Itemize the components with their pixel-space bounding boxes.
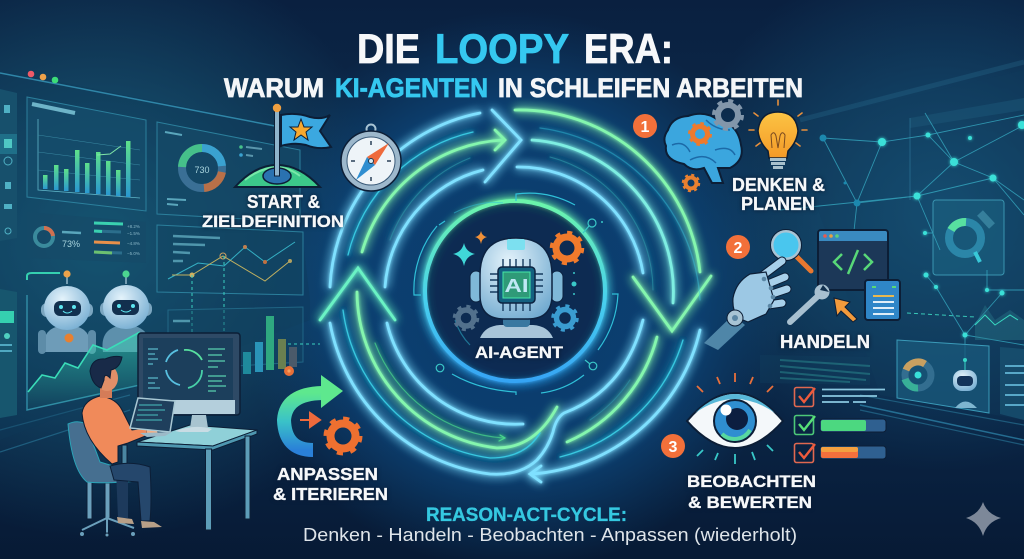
title: WARUM xyxy=(224,73,324,103)
lower left panel xyxy=(0,273,140,418)
step 1: think and plan xyxy=(633,100,825,214)
icon: robot hand xyxy=(704,261,787,350)
trousers and shoes xyxy=(110,463,162,528)
thin arcs xyxy=(343,128,700,458)
badge 1 xyxy=(633,114,657,138)
title: LOOPY xyxy=(435,25,569,72)
badge 3: 3 xyxy=(669,439,678,456)
label xyxy=(273,464,388,504)
bar chart panel xyxy=(27,97,146,211)
icon: small arrow xyxy=(300,413,320,427)
head xyxy=(90,356,122,398)
title: ERA: xyxy=(584,25,673,72)
far right panel xyxy=(1000,347,1024,420)
gear orange xyxy=(552,233,582,263)
gear blue xyxy=(553,306,577,330)
monitor xyxy=(138,333,240,432)
icon: curved arrow xyxy=(284,375,343,450)
person at desk xyxy=(68,333,257,537)
gear small xyxy=(683,175,699,191)
label: BEOBACHTEN xyxy=(687,472,816,491)
sparkles xyxy=(453,231,487,266)
label: Start & Zieldefinition: ZIELDEFINITION xyxy=(202,212,344,231)
progress panel 73%: +8.2% xyxy=(127,224,140,229)
icon: magnifier xyxy=(770,230,811,271)
label: AI-Agent: AI-AGENT xyxy=(475,343,564,362)
dim list panel xyxy=(760,355,870,385)
checklist xyxy=(794,388,886,462)
desk xyxy=(122,425,257,530)
reason-act-cycle caption: Denken - Handeln - Beobachten - Anpassen (wiederholt) xyxy=(303,525,797,545)
green arcs xyxy=(320,110,711,448)
icon: card xyxy=(865,280,900,320)
left dashboard wall xyxy=(0,70,320,440)
donut panel 730: 730 xyxy=(194,165,210,175)
icon: flag on hill xyxy=(235,104,331,187)
badge 2 xyxy=(726,235,750,259)
gear on brain xyxy=(690,124,710,144)
label: ANPASSEN xyxy=(277,464,378,484)
icon: gear xyxy=(326,419,360,453)
gear grey xyxy=(454,306,478,330)
window dots xyxy=(28,71,58,83)
progress panel 73%: −4.8% xyxy=(127,241,140,246)
lower bar panel xyxy=(168,307,320,376)
title xyxy=(224,25,803,103)
progress panel 73%: −1.5% xyxy=(127,231,140,236)
step 2: act xyxy=(704,230,900,352)
inner agent ring xyxy=(414,193,618,395)
neon loop arrows xyxy=(320,110,711,482)
progress panel 73%: −5.0% xyxy=(127,251,140,256)
title: DIE xyxy=(357,25,420,72)
chair xyxy=(68,422,139,537)
reason-act-cycle caption: REASON-ACT-CYCLE: xyxy=(426,505,627,526)
robot right xyxy=(100,270,152,352)
title: IN SCHLEIFEN ARBEITEN xyxy=(498,73,803,103)
gear grey xyxy=(714,101,742,129)
icon: code window xyxy=(818,230,888,290)
badge 2: 2 xyxy=(734,240,743,257)
label: & BEWERTEN xyxy=(688,493,812,512)
sidebar xyxy=(0,89,17,241)
mini dashboard with robot xyxy=(897,340,989,413)
icon: light bulb xyxy=(749,100,807,169)
step 3: observe xyxy=(661,373,886,512)
adapt and iterate xyxy=(273,375,388,504)
progress panel 73%: 73% xyxy=(62,239,80,249)
label: DENKEN & xyxy=(732,175,825,195)
chart panel xyxy=(933,200,1004,275)
icon: compass xyxy=(341,124,401,191)
title: KI-AGENTEN xyxy=(335,73,488,103)
center AI robot icon: AI xyxy=(504,276,528,296)
label xyxy=(687,472,816,512)
robot left xyxy=(38,270,96,354)
blue arcs xyxy=(330,110,700,482)
label xyxy=(732,175,825,214)
laptop xyxy=(130,398,175,437)
reason-act-cycle caption xyxy=(303,505,797,545)
badge 3 xyxy=(661,434,685,458)
back window xyxy=(910,98,1024,200)
icon: wrench xyxy=(790,284,830,322)
right dashboard wall with network xyxy=(760,62,1024,440)
label: & ITERIEREN xyxy=(273,484,388,504)
icon: brain xyxy=(664,114,742,183)
center AI robot icon xyxy=(453,231,582,338)
icon: eye xyxy=(687,373,783,464)
progress panel 73% xyxy=(27,212,146,263)
dashed connector and mini chart xyxy=(907,305,1024,340)
network graph xyxy=(780,113,1024,360)
donut panel 730 xyxy=(157,122,300,222)
growth chart xyxy=(28,332,140,410)
sparkle watermark xyxy=(966,502,1001,536)
robots with growth chart xyxy=(28,270,152,410)
line chart panel xyxy=(157,225,303,345)
badge 1: 1 xyxy=(641,119,650,136)
icon: cursor arrow xyxy=(834,298,857,322)
label: HANDELN xyxy=(780,332,870,352)
label: PLANEN xyxy=(741,194,815,214)
torso and arm xyxy=(82,396,158,464)
label: Start & Zieldefinition: START & xyxy=(247,192,320,212)
label: Start & Zieldefinition xyxy=(202,192,344,231)
